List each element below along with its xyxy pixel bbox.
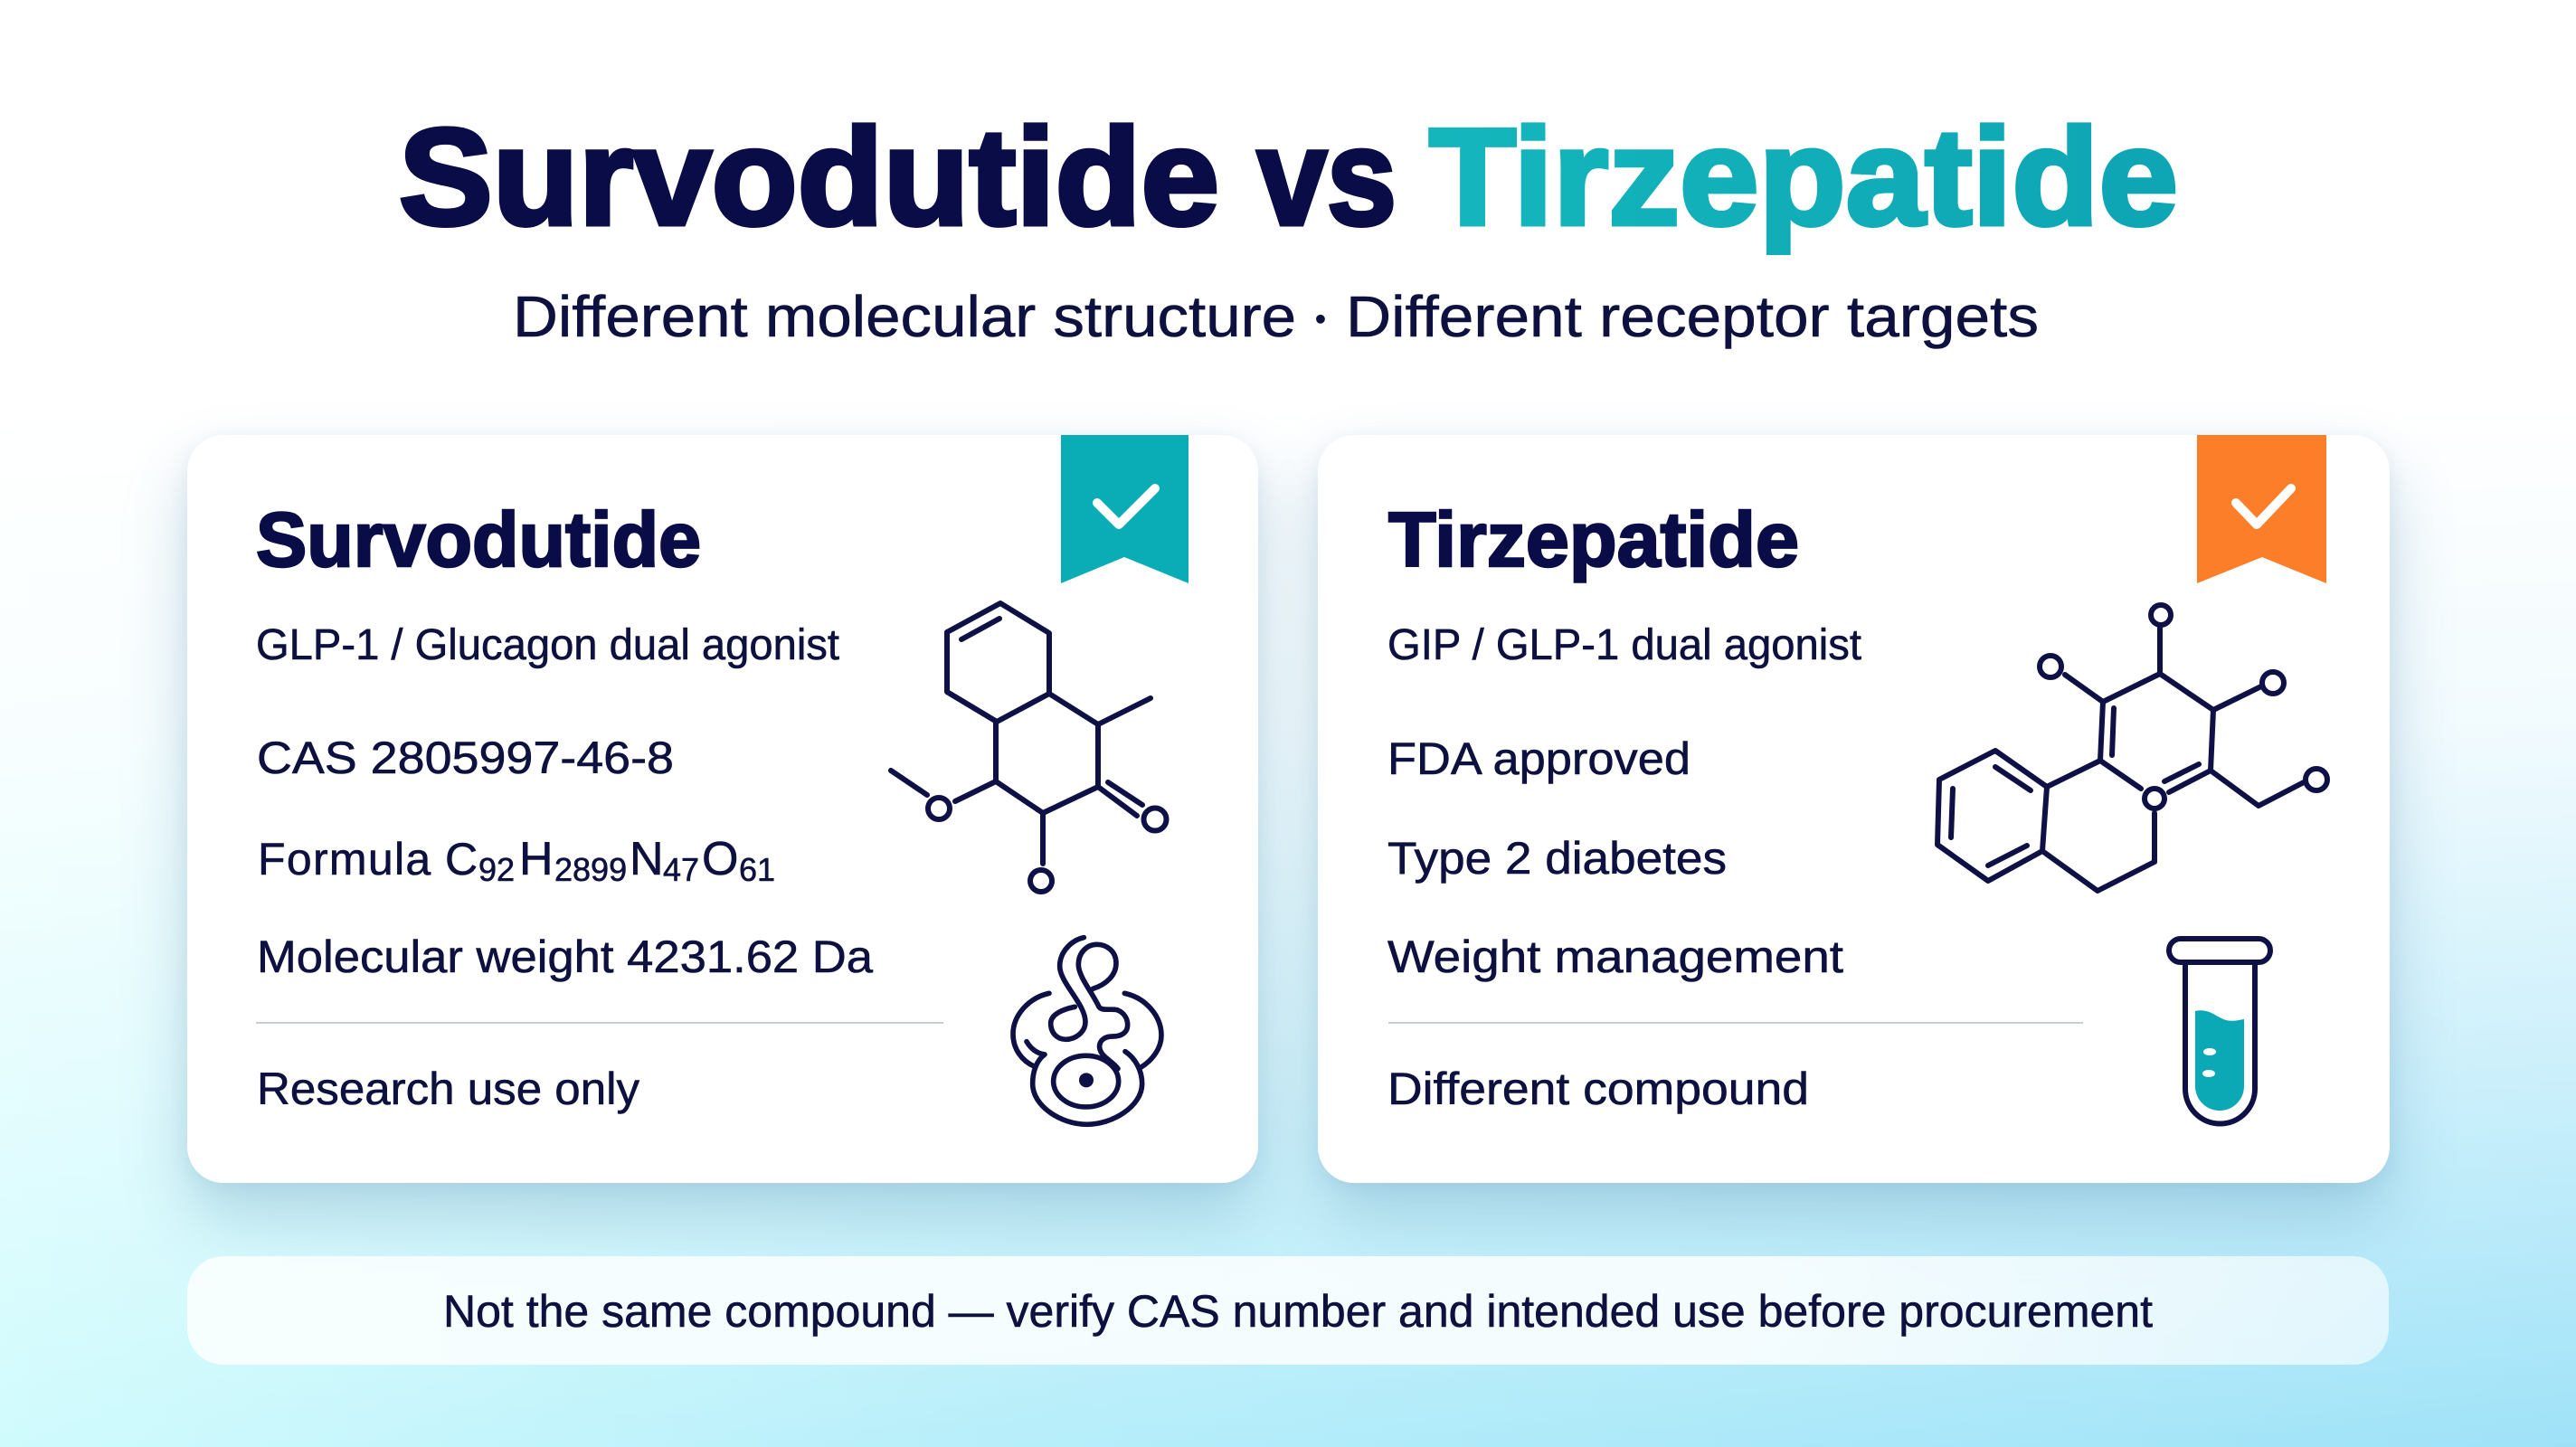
title: vs xyxy=(1257,100,1397,254)
text: mechanism: GIP / GLP-1 dual agonist xyxy=(1387,621,1861,669)
text: research use: Research use only xyxy=(257,1064,639,1114)
heading: Tirzepatide: Tirzepatide xyxy=(1388,497,1799,583)
icon: test tube xyxy=(2169,939,2270,1123)
text: molecular weight: Molecular weight 4231.62 Da xyxy=(257,932,873,982)
text: formula: 47 xyxy=(663,851,699,888)
text: formula: 61 xyxy=(739,851,775,888)
text: weight management: Weight management xyxy=(1387,932,1843,982)
subtitle: Different molecular structure xyxy=(513,284,1296,349)
text: FDA approved: FDA approved xyxy=(1387,733,1690,784)
subtitle: Different receptor targets xyxy=(1346,284,2039,349)
text: type 2 diabetes: Type 2 diabetes xyxy=(1387,833,1727,884)
subtitle xyxy=(513,284,2039,349)
icon: organic coil xyxy=(1013,938,1161,1124)
text: formula: O xyxy=(702,833,738,885)
text: formula: N xyxy=(630,833,664,885)
callout: verification note xyxy=(187,1256,2389,1365)
title: Tirzepatide xyxy=(1429,100,2178,254)
text: different compound: Different compound xyxy=(1387,1064,1809,1114)
icon: orange bookmark badge xyxy=(2197,435,2326,583)
heading: Survodutide: Survodutide xyxy=(256,497,701,583)
icon: molecule structure xyxy=(1937,605,2327,891)
icon: molecule structure xyxy=(891,603,1167,892)
text: formula: 2899 xyxy=(554,851,627,888)
text: mechanism: GLP-1 / Glucagon dual agonist xyxy=(256,621,839,669)
panel: Tirzepatide card xyxy=(1318,435,2390,1183)
text: formula: Formula xyxy=(258,834,431,884)
text: formula: H xyxy=(519,833,554,885)
icon: teal bookmark badge xyxy=(1061,435,1189,583)
text: formula: 92 xyxy=(478,851,515,888)
subtitle: • xyxy=(1315,302,1326,336)
panel: Survodutide card xyxy=(187,435,1258,1183)
title: Survodutide xyxy=(399,100,1219,254)
text: formula: C xyxy=(445,834,478,884)
title xyxy=(399,100,2178,255)
callout: verification note: Not the same compound — verify CAS number and intended use before procurement xyxy=(443,1286,2153,1337)
text: CAS number: CAS 2805997-46-8 xyxy=(257,733,674,783)
